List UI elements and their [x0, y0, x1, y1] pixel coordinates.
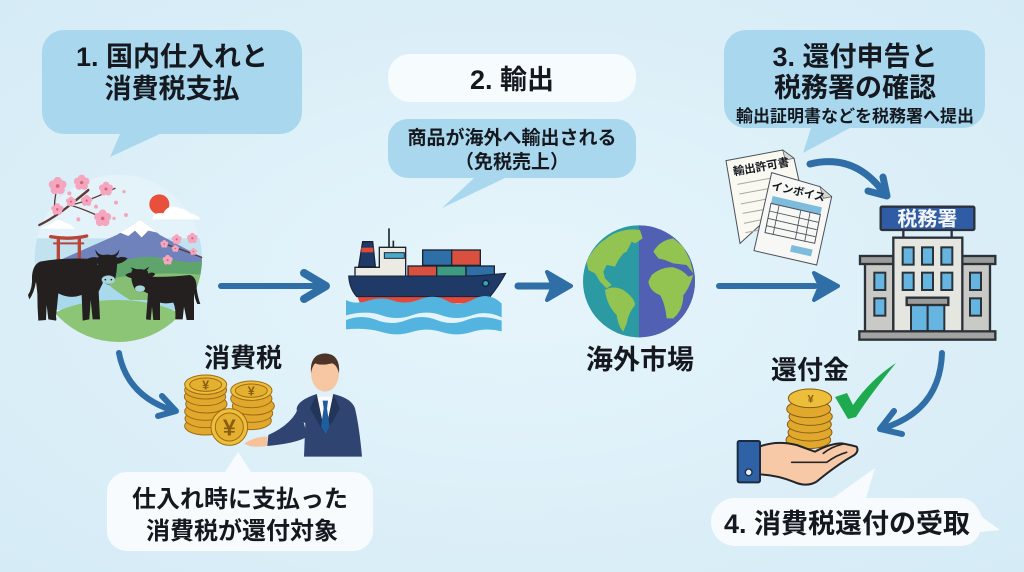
icon: yen coin stacks: ¥ [202, 378, 209, 392]
arrow: globe to tax office [719, 273, 838, 300]
callout: refund target note: 消費税が還付対象 [146, 517, 338, 545]
icon: yen coin stacks: ¥ [223, 414, 236, 440]
arrow: ship to globe [518, 272, 571, 300]
icon: large black cow [28, 249, 128, 321]
panel: step 2 description bubble [388, 119, 636, 208]
icon: invoice document: インボイス [770, 179, 826, 204]
callout: step 4 refund receipt [711, 468, 1000, 546]
panel: step 2 description bubble: 商品が海外へ輸出される [407, 126, 617, 149]
icon: businessman in suit [244, 353, 362, 457]
label: overseas market: 海外市場 [586, 345, 694, 375]
icon: tax office building [859, 207, 995, 340]
callout: step 4 refund receipt: 4. 消費税還付の受取 [724, 509, 970, 539]
callout: refund target note [107, 452, 373, 551]
icon: hand holding coin stack: ¥ [808, 393, 815, 405]
panel: step 3 speech bubble [724, 30, 985, 153]
icon: export permit document: 輸出許可書 [732, 155, 790, 179]
icon: globe [583, 223, 699, 340]
arrow: documents to tax office [810, 162, 887, 196]
panel: step 1 speech bubble: 1. 国内仕入れと [76, 42, 268, 72]
icon: export permit and invoice documents [726, 150, 832, 265]
panel: step 1 speech bubble [42, 30, 302, 157]
icon: Japan scene with wagyu cattle [28, 174, 202, 342]
icon: small black cow [125, 267, 200, 320]
arrow: scene to consumption tax coins [119, 353, 176, 416]
panel: step 2 description bubble: （免税売上） [455, 150, 569, 173]
panel: step 2 title pill: 2. 輸出 [470, 65, 554, 95]
panel: step 2 title pill [388, 54, 636, 102]
icon: hand holding coin stack [738, 389, 857, 485]
icon: yen coin stacks [184, 375, 274, 445]
callout: refund target note: 仕入れ時に支払った [132, 486, 348, 513]
arrow: scene to ship [221, 273, 326, 299]
panel: step 1 speech bubble: 消費税支払 [104, 74, 240, 104]
arrow: tax office to refund [880, 353, 942, 434]
icon: yen coin stacks: ¥ [248, 384, 255, 398]
panel: step 3 speech bubble: 税務署の確認 [774, 73, 936, 103]
label: consumption tax: 消費税 [204, 343, 282, 373]
icon: container ship on waves [346, 228, 506, 334]
panel: step 3 speech bubble: 輸出証明書などを税務署へ提出 [736, 106, 974, 126]
icon: tax office building: 税務署 [897, 208, 957, 231]
panel: step 3 speech bubble: 3. 還付申告と [772, 42, 938, 72]
label: refund money: 還付金 [771, 355, 849, 385]
icon: green check mark [835, 363, 896, 419]
